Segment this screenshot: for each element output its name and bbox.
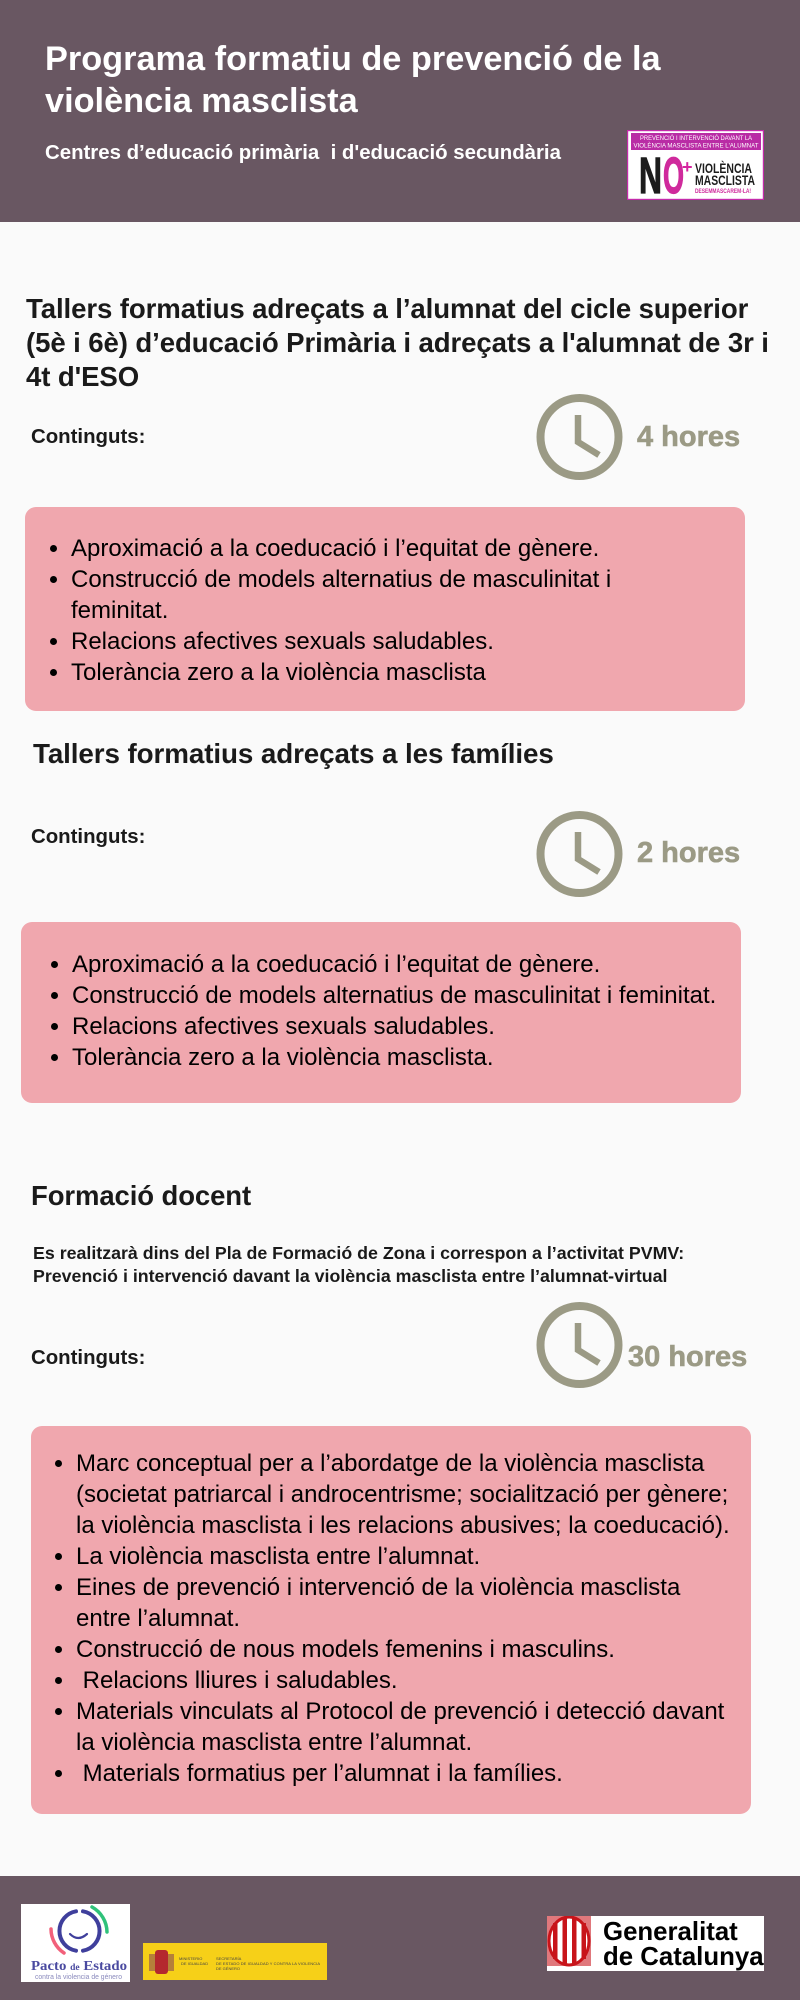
footer band [0,1876,800,2000]
panel: continguts docent: Materials vinculats al Protocol de prevenció i detecció davant [76,1698,724,1725]
duration: 4 hores: 4 hores [637,421,740,453]
panel: continguts docent: Construcció de nous models femenins i masculins. [76,1636,615,1663]
panel: continguts famílies: Construcció de models alternatius de masculinitat i feminitat. [72,982,716,1009]
panel: continguts alumnat: Relacions afectives sexuals saludables. [71,628,494,655]
logo: Govern d'Espanya: SECRETARÍA [216,1956,242,1961]
label: continguts 2: Continguts: [31,826,145,848]
panel: continguts famílies: Relacions afectives sexuals saludables. [72,1013,495,1040]
logo: Generalitat de Catalunya [547,1916,764,1971]
panel: continguts alumnat: Aproximació a la coeducació i l’equitat de gènere. [71,535,599,562]
header band [0,0,800,222]
logo: Govern d'Espanya: MINISTERIO [179,1956,202,1961]
panel: continguts docent: la violència masclista i les relacions abusives; la coeducació). [76,1512,730,1539]
heading: tallers alumnat: 4t d'ESO [26,361,139,392]
title [45,40,661,120]
subtitle: Centres d’educació primària i d'educació secundària [45,142,561,164]
panel: continguts alumnat: Construcció de models alternatius de masculinitat i [71,566,611,593]
logo: No+ violència masclista: + [682,157,693,177]
logo: Govern d'Espanya: DE IGUALDAD [181,1961,208,1966]
panel: continguts docent: Eines de prevenció i intervenció de la violència masclista [76,1574,680,1601]
panel: continguts docent: la violència masclista entre l’alumnat. [76,1729,472,1756]
heading: tallers alumnat: Tallers formatius adreçats a l’alumnat del cicle superior [26,293,748,324]
heading: tallers alumnat [26,293,769,392]
icon: clock 4 hores [536,394,622,480]
icon: clock 2 hores [536,811,622,897]
logo: Pacto de Estado: contra la violencia de género [35,1972,122,1981]
panel: continguts docent: Relacions lliures i saludables. [83,1667,398,1694]
panel: continguts docent: entre l’alumnat. [76,1605,240,1632]
logo: Generalitat de Catalunya: de Catalunya [603,1943,764,1971]
logo: No+ violència masclista: PREVENCIÓ I INTERVENCIÓ DAVANT LA [640,135,753,142]
logo: Pacto de Estado [21,1904,130,1982]
panel: continguts docent: (societat patriarcal i androcentrisme; socialització per gènere; [76,1481,728,1508]
panel: continguts famílies: Aproximació a la coeducació i l’equitat de gènere. [72,951,600,978]
panel: continguts docent: La violència masclista entre l’alumnat. [76,1543,480,1570]
heading: formació docent: Formació docent [31,1180,251,1211]
duration: 30 hores: 30 hores [628,1341,747,1373]
panel: continguts docent: Marc conceptual per a l’abordatge de la violència masclista [76,1450,704,1477]
heading: tallers famílies: Tallers formatius adreçats a les famílies [33,738,554,769]
panel: continguts docent: Materials formatius per l’alumnat i la famílies. [83,1760,563,1787]
text: pla de formació [33,1243,684,1286]
title: Programa formatiu de prevenció de la [45,40,661,78]
panel: continguts famílies: Tolerància zero a la violència masclista. [72,1044,494,1071]
logo: Generalitat de Catalunya: Generalitat [603,1918,738,1946]
icon: clock 30 hores [536,1302,622,1388]
panel: continguts alumnat: feminitat. [71,597,168,624]
heading: tallers alumnat: (5è i 6è) d’educació Primària i adreçats a l'alumnat de 3r i [26,327,769,358]
text: pla de formació: Es realitzarà dins del Pla de Formació de Zona i correspon a l’activitat PVMV: [33,1243,684,1263]
panel: continguts alumnat: Tolerància zero a la violència masclista [71,659,486,686]
label: continguts 3: Continguts: [31,1347,145,1369]
logo: Govern d'Espanya: DE GÉNERO [216,1966,240,1971]
duration: 2 hores: 2 hores [637,837,740,869]
panel: continguts docent [31,1426,751,1814]
text: pla de formació: Prevenció i intervenció davant la violència masclista entre l’alumnat-virtual [33,1266,667,1286]
logo: Govern d'Espanya [143,1943,327,1980]
title: violència masclista [45,82,358,120]
logo: Pacto de Estado: Pacto de Estado [31,1959,127,1974]
logo: No+ violència masclista: VIOLÈNCIA MASCLISTA ENTRE L'ALUMNAT [634,142,759,150]
logo: Govern d'Espanya: DE ESTADO DE IGUALDAD Y CONTRA LA VIOLENCIA [216,1961,320,1966]
panel: continguts alumnat [25,507,745,711]
logo: No+ violència masclista [627,130,764,200]
label: continguts 1: Continguts: [31,426,145,448]
panel: continguts famílies [21,922,741,1103]
